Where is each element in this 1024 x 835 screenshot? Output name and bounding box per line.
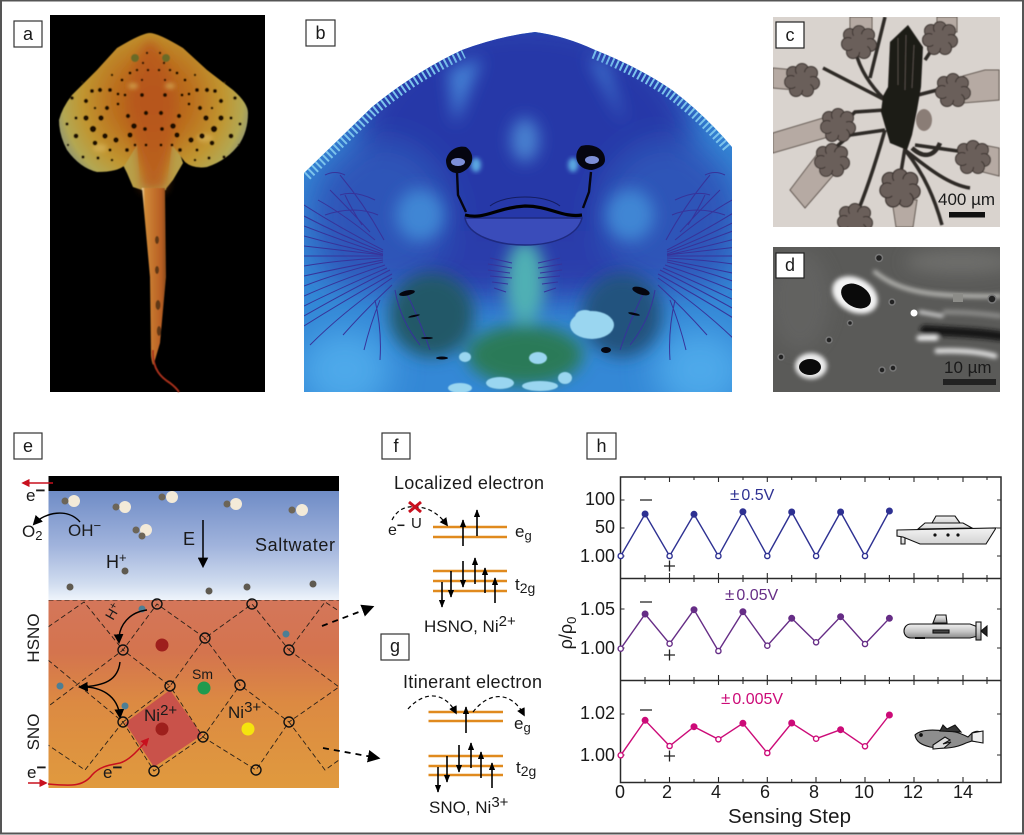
text labels: SNO <box>24 714 43 750</box>
x tick labels: 10 <box>854 782 874 802</box>
x tick labels: 4 <box>711 782 721 802</box>
voltage labels <box>721 485 783 708</box>
series: 0.5 V <box>618 508 892 559</box>
text labels: 2+ <box>160 702 177 719</box>
label b <box>306 20 335 46</box>
text labels: − <box>112 758 122 777</box>
pale patches on disc <box>93 83 213 152</box>
text labels: OH <box>68 521 94 540</box>
plot frames <box>620 477 1001 782</box>
y tick labels <box>580 489 615 765</box>
voltage labels: ±0.5V <box>730 485 775 504</box>
x tick labels: 0 <box>615 782 625 802</box>
text f: e <box>388 522 397 539</box>
text f: t <box>515 575 520 594</box>
small pore <box>795 353 827 379</box>
panel a: ray photograph <box>14 15 265 392</box>
oxide layer <box>48 600 339 788</box>
label c: c <box>786 25 794 45</box>
series: 0.05 V <box>618 607 892 654</box>
central trunk <box>128 40 175 190</box>
jaw <box>465 218 582 245</box>
text f: − <box>397 517 405 533</box>
text f: g <box>524 528 532 543</box>
scale bar c: 400 µm <box>938 190 995 209</box>
voltage labels: ±0.005V <box>721 689 783 708</box>
lattice dashed lines <box>48 600 339 771</box>
text labels: − <box>35 481 45 500</box>
receptor structures <box>773 17 999 236</box>
text f: 2g <box>520 580 535 596</box>
label c <box>776 22 804 48</box>
lobed bulbs <box>784 22 990 236</box>
gill rays <box>488 258 562 292</box>
label a <box>14 21 42 47</box>
spin arrows f <box>442 510 495 607</box>
pelvic marks <box>399 285 651 360</box>
eye glows <box>471 158 578 172</box>
text g: 3+ <box>491 794 509 811</box>
tail markings <box>155 236 161 336</box>
label f <box>382 433 410 459</box>
central dark mass <box>881 25 923 150</box>
x tick labels <box>615 782 973 802</box>
saltwater layer <box>48 491 339 600</box>
label h: h <box>596 436 607 456</box>
eyes <box>131 54 170 62</box>
sacs <box>773 17 999 227</box>
large pore <box>829 273 881 317</box>
label a: a <box>23 24 34 44</box>
text f: HSNO, Ni <box>424 617 499 636</box>
heading f: Localized electron <box>394 473 544 493</box>
stained body <box>304 32 732 392</box>
text g: 2g <box>521 763 536 779</box>
oxygen atoms <box>118 599 294 776</box>
nickel and samarium atoms <box>156 638 254 736</box>
panel c: electroreceptor micrograph <box>773 17 1000 236</box>
nasal lines <box>457 172 591 212</box>
edge stripes <box>304 50 732 173</box>
black curved arrows <box>34 513 147 717</box>
text labels: − <box>94 518 101 533</box>
panel h: resistance sensing chart <box>556 433 1001 828</box>
x tick labels: 6 <box>760 782 770 802</box>
text labels: e <box>26 486 35 505</box>
y axis title: 0 <box>564 617 579 624</box>
text labels: 2 <box>35 528 42 543</box>
text labels: − <box>36 758 46 777</box>
panel b: cleared ray skeleton <box>300 15 746 410</box>
stalks <box>823 17 970 225</box>
text f: 2+ <box>499 613 516 630</box>
eyes <box>446 145 605 173</box>
icon: boat <box>897 516 996 544</box>
text labels: 3+ <box>244 699 261 716</box>
label d <box>776 253 804 278</box>
text f <box>388 515 535 636</box>
text labels: e <box>27 763 36 782</box>
text f: e <box>515 522 524 541</box>
y tick labels: 1.00 <box>580 546 615 566</box>
x tick labels: 14 <box>953 782 973 802</box>
text f: U <box>411 515 422 532</box>
field arrow <box>202 520 204 566</box>
dark head region <box>304 32 732 392</box>
ray body <box>59 33 248 392</box>
spin arrows g <box>438 707 492 792</box>
label d: d <box>785 255 795 275</box>
label e <box>14 433 42 459</box>
y tick labels: 50 <box>595 517 615 537</box>
spots <box>65 52 149 161</box>
y tick labels: 1.02 <box>580 703 615 723</box>
red cross <box>409 502 421 512</box>
text labels: E <box>183 529 195 549</box>
text labels: Sm <box>192 666 213 682</box>
scale bar d: 10 µm <box>944 358 992 377</box>
text labels: HSNO <box>24 613 43 663</box>
y tick labels: 100 <box>585 489 615 509</box>
water molecules <box>62 491 308 540</box>
scale bar c <box>938 190 995 218</box>
y tick labels: 1.00 <box>580 745 615 765</box>
label e: e <box>23 436 33 456</box>
Ni2+ octahedron highlight <box>125 690 202 767</box>
panel d: pore micrograph <box>770 247 1015 392</box>
mirrored fin rays <box>620 172 732 360</box>
specks <box>778 254 996 373</box>
pale patches <box>448 310 614 393</box>
label f: f <box>393 436 399 456</box>
text g: SNO, Ni <box>429 798 491 817</box>
fin rays <box>304 172 430 360</box>
sign markers <box>640 500 675 762</box>
label b: b <box>315 23 326 43</box>
label h <box>587 433 616 459</box>
energy levels g <box>428 712 503 775</box>
electrode <box>48 476 339 491</box>
pelvic fins <box>123 140 183 190</box>
label g <box>381 634 409 660</box>
text labels <box>22 481 335 782</box>
text labels: O <box>22 522 35 541</box>
text labels: Saltwater <box>255 535 335 555</box>
x tick labels: 2 <box>662 782 672 802</box>
blocked hop arrow <box>392 507 447 525</box>
y tick labels: 1.00 <box>580 638 615 658</box>
y tick labels: 1.05 <box>580 599 615 619</box>
mirrored spots <box>158 52 242 161</box>
voltage labels: ±0.05V <box>725 585 778 604</box>
small blue atoms <box>56 606 290 710</box>
label g: g <box>390 636 400 656</box>
disc <box>59 33 248 190</box>
mouth <box>465 206 582 216</box>
x tick labels: 8 <box>809 782 819 802</box>
text g: e <box>514 714 523 733</box>
panel g: itinerant electron levels <box>381 634 542 817</box>
lighter head patches <box>390 55 662 385</box>
panel e: device schematic <box>14 433 378 788</box>
hopping arrows <box>408 696 524 715</box>
icon: submarine <box>904 615 987 640</box>
dashed pointers <box>322 607 378 758</box>
x axis title: Sensing Step <box>728 805 851 828</box>
electron arrows <box>23 483 148 785</box>
text labels: e <box>103 763 112 782</box>
energy levels f <box>433 527 507 591</box>
y axis title: ρ/ρ <box>556 624 576 649</box>
text labels: Ni <box>144 706 160 725</box>
upper lip <box>490 197 560 206</box>
tick marks <box>620 477 1001 782</box>
text g: g <box>523 720 531 735</box>
text labels: + <box>119 550 127 565</box>
text g <box>429 714 536 817</box>
heading g: Itinerant electron <box>403 672 542 692</box>
hydrogen ions <box>66 568 316 594</box>
text labels: H <box>106 552 119 572</box>
icon: fish <box>915 725 983 749</box>
text labels: H <box>102 606 121 622</box>
text labels: Ni <box>228 703 244 722</box>
scale bar d <box>943 358 996 385</box>
panel f: localized electron levels <box>382 433 544 636</box>
tail tip <box>153 350 179 392</box>
series: 0.005 V <box>618 712 892 758</box>
pores and streaks <box>770 250 1015 379</box>
tail <box>142 188 166 365</box>
text g: t <box>516 758 521 777</box>
text labels: + <box>107 600 120 612</box>
x tick labels: 12 <box>903 782 923 802</box>
